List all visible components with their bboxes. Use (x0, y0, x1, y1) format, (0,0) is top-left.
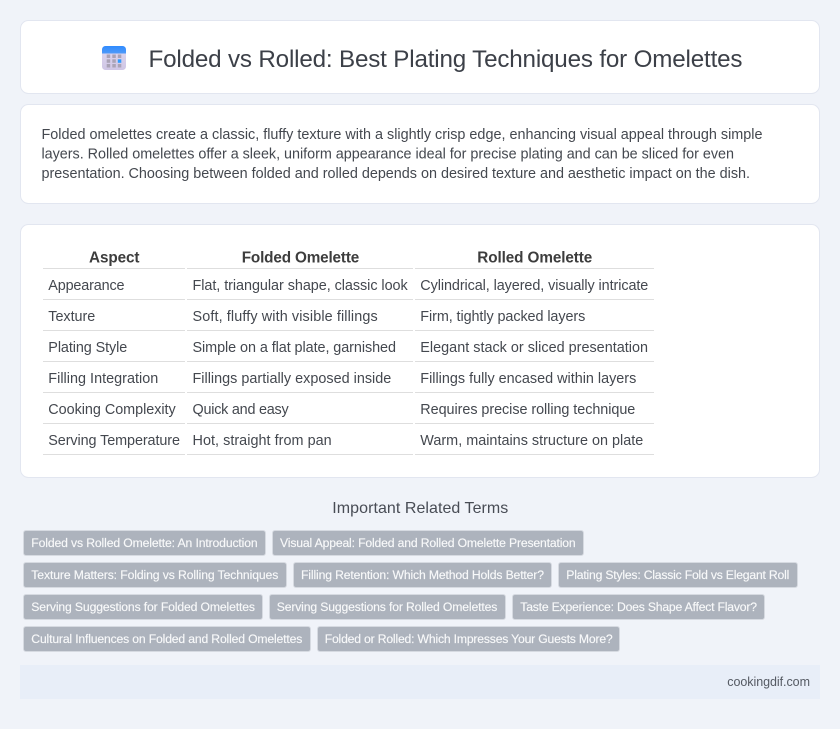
table row: serving temperature: Serving Temperature (48, 433, 180, 449)
table row: plating style: Simple on a flat plate, garnished (192, 340, 396, 356)
panel: related term tags (24, 530, 798, 652)
tag: filling retention: Filling Retention: Which Method Holds Better? (301, 568, 544, 582)
table row: texture: Texture (48, 309, 95, 325)
tag: visual appeal (272, 530, 584, 556)
text block: intro paragraph: layers. Rolled omelettes offer a sleek, uniform appearance ideal for precise plating and can be sliced for even (42, 146, 734, 162)
table row: filling integration: Filling Integration (48, 371, 158, 387)
tag: texture matters: Texture Matters: Folding vs Rolling Techniques (31, 568, 278, 582)
table row: plating style: Plating Style (48, 340, 127, 356)
tag: visual appeal: Visual Appeal: Folded and Rolled Omelette Presentation (280, 536, 576, 550)
panel: introduction text (20, 104, 820, 204)
tag: plating styles: Plating Styles: Classic Fold vs Elegant Roll (566, 568, 789, 582)
table row: serving temperature: Hot, straight from pan (192, 433, 332, 449)
table row: filling integration: Fillings partially exposed inside (192, 371, 391, 387)
table row: appearance: Flat, triangular shape, classic look (192, 278, 408, 294)
table row: appearance: Appearance (48, 278, 124, 294)
text block: intro paragraph (42, 127, 762, 182)
tag: plating styles (558, 562, 798, 588)
table row: cooking complexity: Requires precise rolling technique (420, 402, 635, 418)
table header row: Folded Omelette (242, 250, 359, 266)
table header row: Rolled Omelette (477, 250, 592, 266)
footer source link: cookingdif.com (727, 675, 810, 689)
tag: introduction: Folded vs Rolled Omelette: An Introduction (31, 536, 258, 550)
tag: taste experience (512, 594, 764, 620)
tag: impress guests (318, 626, 620, 652)
heading: important related terms: Important Related Terms (332, 500, 508, 517)
panel: comparison table (20, 224, 820, 478)
tag: serving rolled (270, 594, 506, 620)
tag: taste experience: Taste Experience: Does Shape Affect Flavor? (520, 600, 757, 614)
tag: serving folded: Serving Suggestions for Folded Omelettes (31, 600, 255, 614)
table row: texture: Firm, tightly packed layers (420, 309, 585, 325)
table row: cooking complexity: Cooking Complexity (48, 402, 176, 418)
table row: plating style: Elegant stack or sliced presentation (420, 340, 648, 356)
table row: serving temperature (43, 433, 654, 455)
footer bar (20, 665, 820, 699)
table row: appearance (43, 278, 654, 300)
tag: cultural influences (24, 626, 310, 652)
title: Folded vs Rolled: Best Plating Techniques for Omelettes (148, 46, 742, 73)
tag: serving rolled: Serving Suggestions for Rolled Omelettes (277, 600, 497, 614)
icon: calendar grid (102, 46, 126, 70)
tag: texture matters (24, 562, 286, 588)
tag: cultural influences: Cultural Influences on Folded and Rolled Omelettes (31, 632, 302, 646)
tag: impress guests: Folded or Rolled: Which Impresses Your Guests More? (325, 632, 613, 646)
tag: filling retention (294, 562, 552, 588)
table row: texture (43, 309, 654, 331)
tag: serving folded (24, 594, 262, 620)
table row: filling integration: Fillings fully encased within layers (420, 371, 636, 387)
table row: texture: Soft, fluffy with visible fillings (192, 309, 378, 325)
tag: introduction (24, 530, 266, 556)
table row: appearance: Cylindrical, layered, visually intricate (420, 278, 648, 294)
table row: serving temperature: Warm, maintains structure on plate (420, 433, 643, 449)
panel: header (20, 20, 820, 94)
table header row (43, 250, 654, 269)
text block: intro paragraph: Folded omelettes create a classic, fluffy texture with a slightly crisp edge, enhancing visual appeal through simple (42, 127, 762, 143)
table row: cooking complexity: Quick and easy (192, 402, 289, 418)
table row: cooking complexity (43, 402, 654, 424)
table header row: Aspect (89, 250, 140, 266)
text block: intro paragraph: presentation. Choosing between folded and rolled depends on desired texture and aesthetic impact on the dish. (42, 166, 750, 182)
table row: plating style (43, 340, 654, 362)
table row: filling integration (43, 371, 654, 393)
